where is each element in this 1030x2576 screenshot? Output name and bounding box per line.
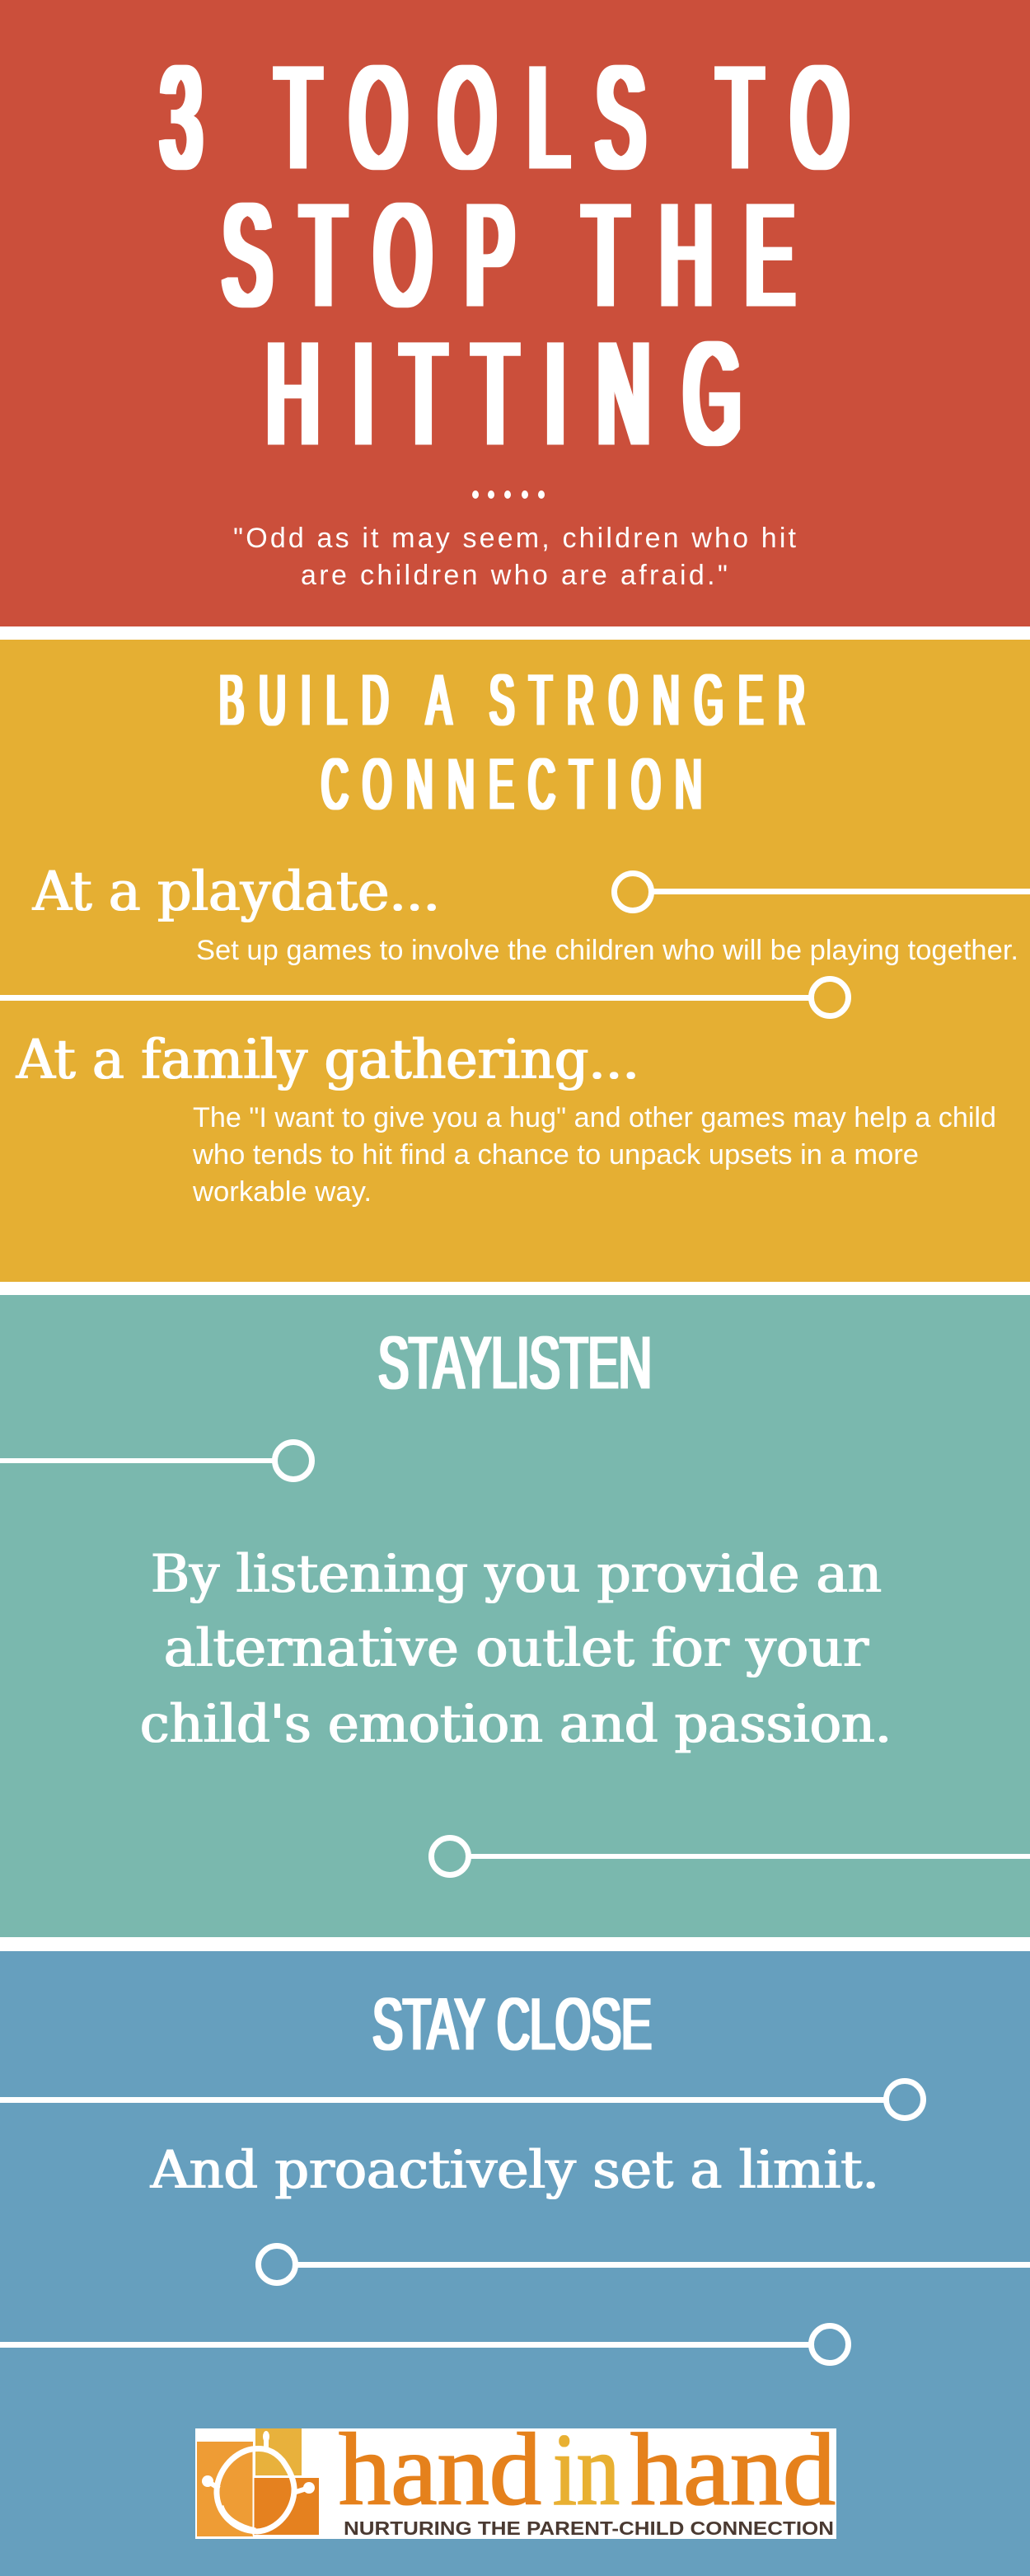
panel: stay close [0, 1951, 1030, 2576]
logo tagline: NURTURING THE PARENT-CHILD CONNECTION [344, 2517, 834, 2539]
connector: bottom [432, 1838, 1030, 1875]
text: listening [140, 1544, 892, 1755]
quote [233, 523, 797, 591]
logo wordmark: in [553, 2413, 620, 2527]
subheading: at a family gathering: At a family gathering... [16, 1028, 639, 1091]
text: listening: child's emotion and passion. [140, 1694, 892, 1755]
connector: family gathering [0, 979, 849, 1016]
heading: stay close: STAY CLOSE [372, 1982, 652, 2065]
connector: bottom [0, 2326, 849, 2363]
decorative dots [472, 490, 545, 499]
connector: middle [259, 2245, 1030, 2283]
logo: hand in hand [195, 2413, 836, 2539]
heading: build a stronger connection: BUILD A STRONGER [219, 659, 805, 740]
quote: are children who are afraid." [301, 560, 728, 591]
logo wordmark: hand [339, 2413, 541, 2527]
text: listening: alternative outlet for your [164, 1618, 868, 1679]
title: 3 TOOLS TO [162, 37, 848, 199]
panel: build a stronger connection [0, 640, 1030, 1282]
text: listening: By listening you provide an [151, 1544, 882, 1605]
text: playdate tip: Set up games to involve the children who will be playing together. [196, 935, 1018, 966]
panel: title [0, 0, 1030, 626]
connector: top [0, 2081, 923, 2119]
title: HITTING [267, 313, 741, 475]
connector: playdate [615, 874, 1030, 910]
heading: staylisten: STAYLISTEN [378, 1322, 652, 1405]
heading: build a stronger connection [219, 659, 805, 824]
quote: "Odd as it may seem, children who hit [233, 523, 797, 554]
title [162, 37, 848, 475]
text: proactively: And proactively set a limit. [150, 2140, 879, 2201]
heading: build a stronger connection: CONNECTION [321, 744, 702, 824]
title: STOP THE [223, 175, 794, 336]
icon: logo mark [197, 2428, 319, 2536]
text: family gathering tip: workable way. [192, 1176, 372, 1208]
logo wordmark: hand [630, 2413, 836, 2527]
text: family gathering tip [192, 1102, 996, 1208]
text: family gathering tip: The "I want to give you a hug" and other games may help a child [193, 1102, 996, 1133]
text: family gathering tip: who tends to hit find a chance to unpack upsets in a more [192, 1139, 919, 1171]
connector: top [0, 1443, 311, 1479]
logo wordmark [339, 2413, 836, 2527]
subheading: at a playdate: At a playdate... [32, 860, 440, 923]
panel: staylisten [0, 1295, 1030, 1937]
